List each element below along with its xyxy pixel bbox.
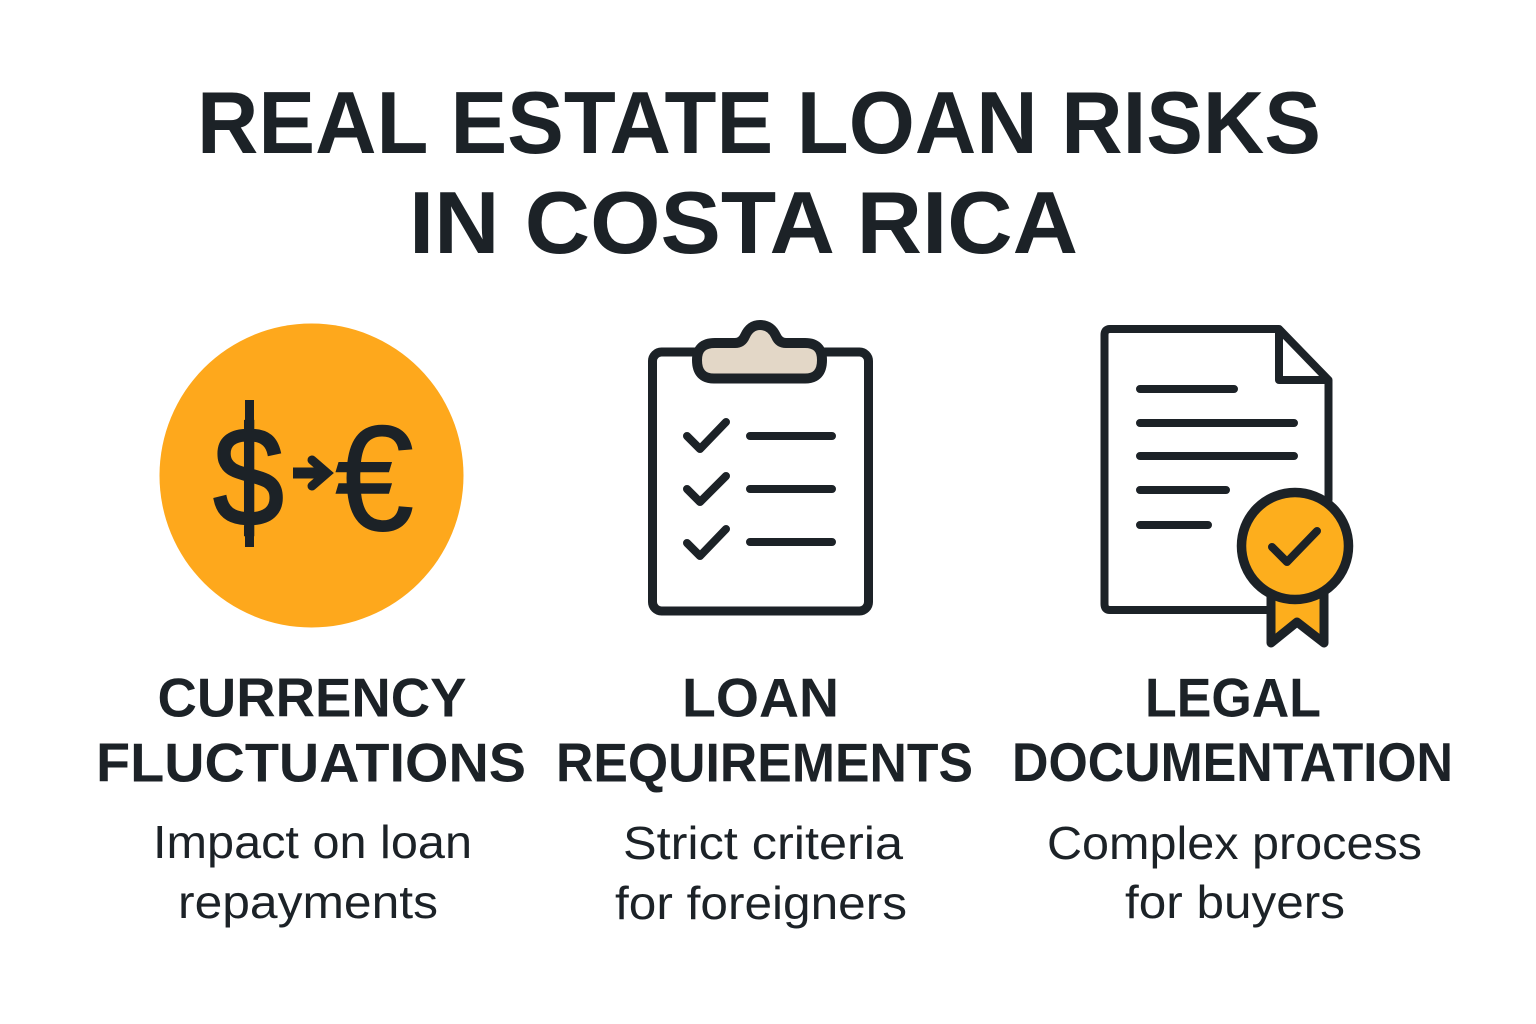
text: legal description (1047, 817, 1422, 928)
heading: loan requirements (556, 666, 973, 794)
title (197, 73, 1321, 272)
heading: legal documentation: LEGAL (1145, 666, 1321, 728)
icon: currency exchange: € (335, 394, 414, 562)
heading: loan requirements: REQUIREMENTS (556, 732, 973, 794)
title: IN COSTA RICA (409, 173, 1078, 272)
text: currency description (153, 816, 472, 928)
heading: legal documentation (1012, 666, 1453, 793)
heading: currency fluctuations: FLUCTUATIONS (96, 732, 526, 794)
text: loan description: Strict criteria (623, 817, 903, 869)
text: legal description: Complex process (1047, 817, 1422, 869)
icon: currency exchange (160, 324, 464, 628)
heading: legal documentation: DOCUMENTATION (1012, 731, 1453, 793)
heading: loan requirements: LOAN (682, 666, 839, 728)
text: currency description: repayments (178, 876, 438, 928)
heading: currency fluctuations: CURRENCY (158, 666, 466, 728)
icon: clipboard checklist (652, 325, 868, 611)
icon: currency exchange: $ (214, 398, 284, 555)
text: loan description (615, 817, 907, 929)
text: legal description: for buyers (1125, 876, 1345, 928)
text: loan description: for foreigners (615, 877, 907, 929)
title: REAL ESTATE LOAN RISKS (197, 73, 1321, 172)
text: currency description: Impact on loan (153, 816, 472, 868)
icon: legal document with seal (1104, 329, 1348, 643)
heading: currency fluctuations (96, 666, 526, 794)
